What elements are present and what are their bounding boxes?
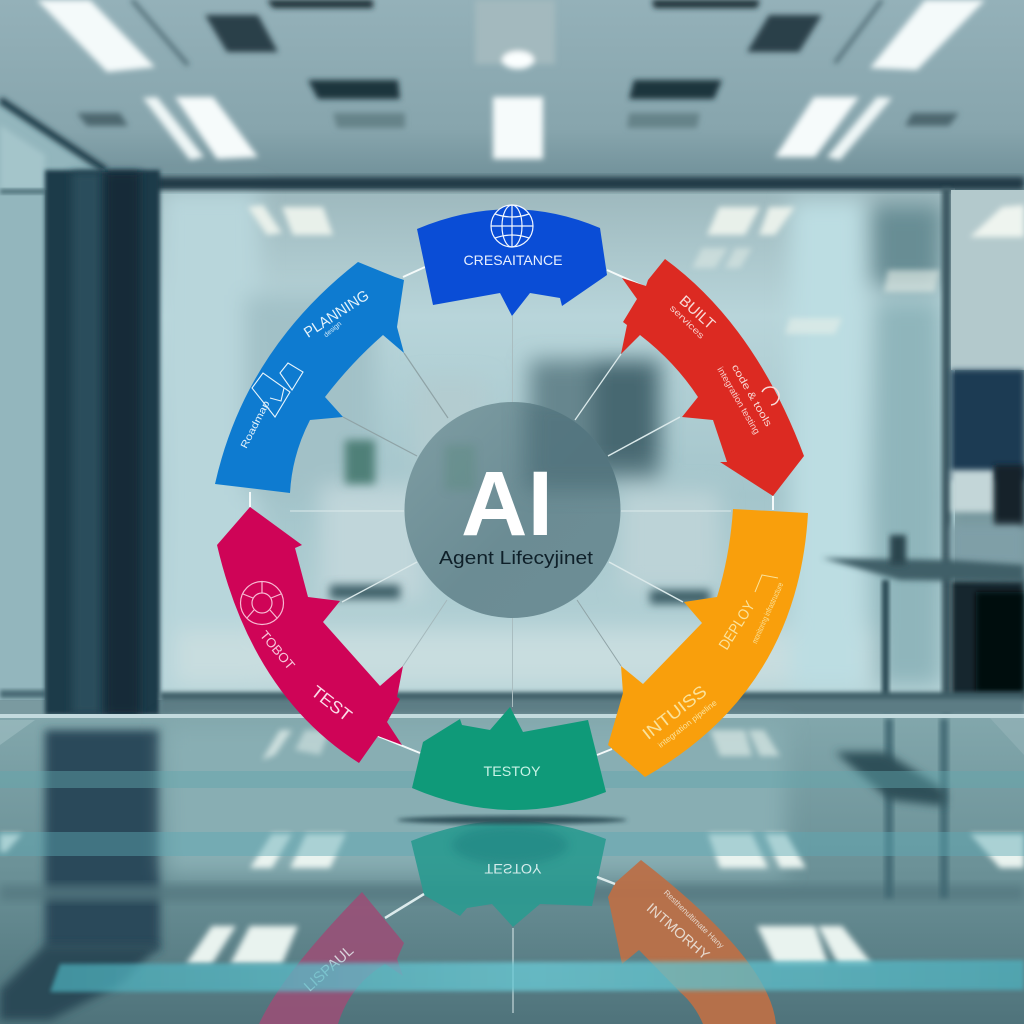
segment: deploy (orange) [608, 509, 808, 777]
label: cresaitance: CRESAITANCE [464, 252, 562, 268]
reflected pink segment [259, 892, 404, 1024]
segment: planning (blue) [215, 262, 404, 493]
label: test note: TOBOT [257, 628, 298, 673]
text: planning note: Roadmap [239, 399, 273, 451]
ceiling edge beam [100, 177, 1024, 190]
reflected label: left: LISPAUL [301, 942, 357, 995]
floor light reflections [0, 730, 1024, 964]
back glass room [155, 188, 955, 700]
reflected orange segment [608, 860, 776, 1024]
segment: build (red) [621, 259, 804, 496]
blurred office background [0, 0, 1024, 715]
under-ring shadow [397, 816, 627, 824]
segment: test (pink) [217, 507, 403, 763]
right wall with desk and monitors [822, 188, 1024, 713]
icon: frame [755, 575, 778, 592]
back floor strip [160, 692, 1024, 715]
subtitle: Agent Lifecyjinet [439, 548, 593, 568]
sub-label: intuiss: integration pipeline [656, 698, 719, 750]
text: build note line 1: code & tools [729, 363, 773, 429]
icon: globe [491, 205, 533, 247]
reflection of the ring on the floor [259, 820, 776, 1024]
reflective floor [0, 716, 1024, 1024]
reflected connector lines [385, 877, 615, 1013]
table edge line [0, 714, 1024, 718]
floor reflections of room [0, 718, 1024, 1020]
label: planning: PLANNING [301, 287, 372, 342]
title: AI: AI [461, 453, 553, 555]
label: testoy: TESTOY [484, 763, 541, 779]
reflected green segment [411, 820, 606, 927]
sub-label: build: services [668, 303, 707, 341]
segment: testoy (green) [412, 707, 606, 810]
icon: arc [762, 387, 779, 405]
reflected label: right: INTMORHY [644, 900, 713, 963]
strong cyan floor band [50, 960, 1024, 992]
icon: wheel [240, 582, 284, 624]
translucent horizontal bands [0, 771, 1024, 856]
central hub [404, 402, 620, 618]
ceiling [0, 0, 1024, 185]
label: build: BUILT [676, 292, 718, 333]
left wall glass and column [0, 100, 160, 715]
text: build note line 2: integration testing [715, 365, 762, 436]
sub-label: deploy: monitoring infrastructure [750, 581, 785, 645]
icon: devices [252, 363, 303, 417]
label: deploy: DEPLOY [716, 598, 759, 653]
reflected sub-label: right: Resthenultimate Hany [662, 888, 726, 950]
label: test: TEST [307, 682, 355, 725]
reflected green inner shadow [452, 825, 568, 865]
sub-label: planning: design [323, 320, 343, 339]
hub see-through blur [446, 402, 620, 495]
segment: cresaitance (cobalt) [417, 205, 607, 316]
spokes linking hub to segments [290, 316, 731, 707]
label: intuiss: INTUISS [639, 682, 710, 744]
white ring connectors between segments [250, 267, 773, 755]
reflected label: testoy: TESTOY [484, 861, 542, 877]
